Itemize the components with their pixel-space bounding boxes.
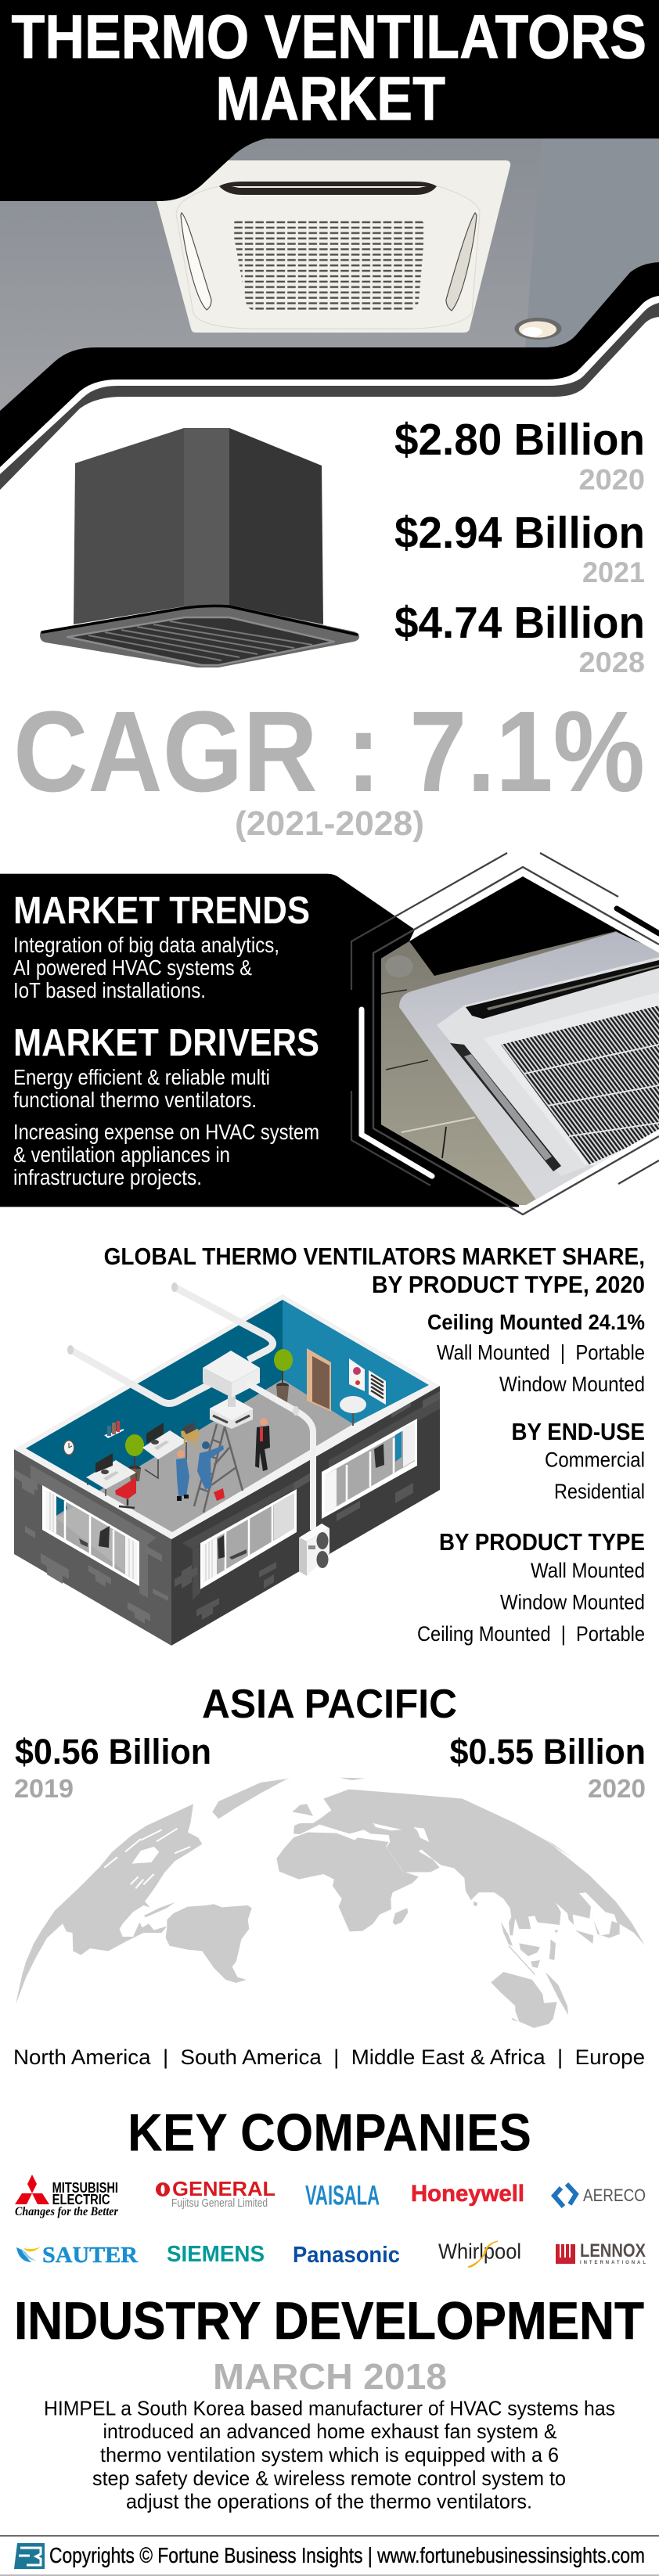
grille frame — [484, 992, 659, 1174]
panel: market trends and drivers — [0, 853, 659, 1214]
logo: Honeywell: Honeywell — [411, 2181, 524, 2207]
logo: Lennox: LENNOX — [580, 2240, 646, 2261]
panel body — [399, 932, 659, 1213]
market size figures: 2020 — [579, 463, 645, 496]
text: industry development body: introduced an advanced home exhaust fan system & — [103, 2419, 557, 2443]
eurasia — [293, 1790, 645, 1945]
australia — [491, 1972, 557, 2028]
door — [307, 1348, 331, 1412]
slot top — [466, 960, 659, 1019]
heading: market share — [104, 1243, 645, 1298]
segment list: share — [427, 1310, 645, 1396]
text: industry development body: adjust the operations of the thermo ventilators. — [126, 2490, 532, 2513]
blue wall right — [283, 1300, 429, 1424]
company logos — [15, 2175, 646, 2268]
bookshelf — [104, 1421, 124, 1438]
text: market drivers: Energy efficient & reliable multi — [13, 1065, 270, 1089]
title — [11, 2, 646, 133]
brick details — [14, 1470, 168, 1624]
logo: General: Fujitsu General Limited — [171, 2196, 268, 2210]
Asia Pacific values: 2019 — [14, 1774, 74, 1803]
market size figures — [394, 415, 645, 678]
photo: ceiling cassette — [0, 133, 659, 423]
logo: Aereco: AERECO — [583, 2186, 646, 2205]
parapet — [14, 1294, 440, 1539]
air slot right — [446, 213, 477, 311]
south america — [166, 1904, 252, 1983]
icon: Fortune Business Insights logo — [14, 2543, 45, 2569]
air slot left — [181, 213, 211, 310]
printer on stand — [181, 1422, 200, 1448]
unit and ducts — [67, 1283, 313, 1530]
round table — [340, 1396, 366, 1426]
return grille — [234, 221, 424, 310]
logo: Mitsubishi Electric — [15, 2175, 119, 2218]
madagascar — [393, 1908, 409, 1925]
red chair — [115, 1477, 136, 1508]
africa — [276, 1833, 419, 1931]
heading: Asia Pacific: ASIA PACIFIC — [202, 1682, 457, 1727]
text: market trends: MARKET TRENDS — [13, 890, 310, 932]
CAGR: (2021-2028) — [235, 804, 424, 843]
fins — [501, 1006, 659, 1164]
white stripe — [0, 0, 659, 474]
logo: Whirlpool: Whirlpool — [438, 2240, 521, 2264]
logo: Aereco — [554, 2184, 646, 2207]
Asia Pacific values: $0.56 Billion — [15, 1732, 211, 1772]
air slot top — [219, 182, 437, 195]
wall bands — [31, 1465, 157, 1545]
icon: ceiling cassette hood — [40, 428, 359, 667]
text: market drivers: infrastructure projects. — [13, 1165, 202, 1189]
Asia Pacific values: 2020 — [588, 1774, 646, 1803]
segment list: by product type — [417, 1528, 645, 1646]
text: industry development body: thermo ventilation system which is equipped with a 6 — [100, 2443, 559, 2466]
posters — [349, 1358, 365, 1391]
text: industry development body: step safety device & wireless remote control system to — [92, 2466, 566, 2490]
Asia Pacific values: $0.55 Billion — [450, 1732, 646, 1772]
segment list: by end-use: Commercial — [545, 1448, 645, 1471]
title: MARKET — [216, 63, 445, 133]
text: market drivers: & ventilation appliances in — [13, 1142, 230, 1167]
outer walls — [14, 1449, 171, 1646]
market size figures: $2.80 Billion — [394, 415, 645, 465]
north america — [16, 1804, 202, 2005]
text: market drivers: MARKET DRIVERS — [13, 1022, 319, 1064]
hero banner — [0, 0, 659, 490]
man in suit — [255, 1418, 270, 1471]
market size figures: $2.94 Billion — [394, 508, 645, 558]
logo: Lennox: INTERNATIONAL — [580, 2261, 646, 2265]
outdoor AC unit — [299, 1524, 330, 1576]
right window — [322, 1419, 417, 1519]
segment list: by product type: Wall Mounted — [531, 1559, 645, 1582]
text: market drivers: functional thermo ventilators. — [13, 1088, 257, 1112]
photo: cassette close-up — [376, 869, 659, 1213]
logo: Panasonic: Panasonic — [293, 2243, 400, 2268]
logo: Siemens: SIEMENS — [167, 2242, 265, 2267]
segment list: share: Ceiling Mounted 24.1% — [427, 1310, 645, 1334]
logo: Mitsubishi Electric: MITSUBISHI — [52, 2180, 118, 2196]
segment list: by end-use — [512, 1418, 645, 1503]
floor — [99, 1380, 353, 1532]
left window — [42, 1485, 139, 1586]
segment list: by product type: Window Mounted — [500, 1590, 645, 1614]
text: market trends: AI powered HVAC systems & — [13, 955, 252, 980]
heading: market share: BY PRODUCT TYPE, 2020 — [372, 1272, 645, 1298]
wall clock — [63, 1440, 75, 1455]
text: market drivers: Increasing expense on HVAC system — [13, 1120, 319, 1144]
market size figures: $4.74 Billion — [394, 598, 645, 648]
middle window — [200, 1489, 297, 1589]
market size figures: 2021 — [582, 556, 645, 588]
Asia Pacific values — [14, 1732, 646, 1803]
worker two — [197, 1441, 224, 1489]
dark stripe — [0, 0, 659, 490]
worker one — [176, 1450, 189, 1501]
downlight — [515, 318, 562, 340]
illustration: isometric building with HVAC — [14, 1283, 440, 1646]
date: MARCH 2018 — [213, 2356, 447, 2397]
text: market drivers — [13, 1022, 319, 1189]
logo: Mitsubishi Electric: ELECTRIC — [52, 2192, 110, 2207]
hexagon frame lines — [351, 853, 659, 1214]
japan and islands — [575, 1930, 593, 1944]
logo: General: GENERAL — [172, 2177, 275, 2200]
cassette panel — [157, 160, 510, 333]
logo: Mitsubishi Electric: Changes for the Better — [15, 2205, 119, 2218]
text: industry development body: HIMPEL a South Korea based manufacturer of HVAC systems has — [44, 2396, 615, 2419]
logo: Lennox — [556, 2240, 646, 2265]
segment list: share: Window Mounted — [499, 1373, 645, 1396]
text: market trends: IoT based installations. — [13, 978, 206, 1002]
segment list: by end-use: BY END-USE — [512, 1418, 645, 1445]
market size figures: 2028 — [579, 646, 645, 678]
map: globe continents — [16, 1778, 645, 2028]
desks — [86, 1423, 187, 1496]
logo: Vaisala: VAISALA — [305, 2181, 380, 2211]
blue wall left — [26, 1300, 283, 1491]
heading: key companies: KEY COMPANIES — [128, 2103, 531, 2163]
logo: General — [156, 2177, 275, 2210]
logo: Sauter: SAUTER — [42, 2243, 139, 2268]
black band — [0, 0, 659, 467]
ladder — [194, 1424, 243, 1513]
segment list: by end-use: Residential — [554, 1480, 645, 1503]
slot left — [450, 1043, 561, 1171]
footer — [0, 2535, 659, 2576]
text: market trends: Integration of big data analytics, — [13, 933, 279, 957]
workers — [176, 1418, 270, 1501]
plants — [125, 1349, 293, 1481]
dark ceiling — [409, 876, 659, 976]
greenland — [212, 1779, 290, 1819]
text: market trends — [13, 890, 310, 1002]
regions list: North America | South America | Middle East & Africa | Europe — [13, 2045, 645, 2069]
text: industry development body — [44, 2396, 615, 2513]
tool bag — [214, 1488, 225, 1501]
